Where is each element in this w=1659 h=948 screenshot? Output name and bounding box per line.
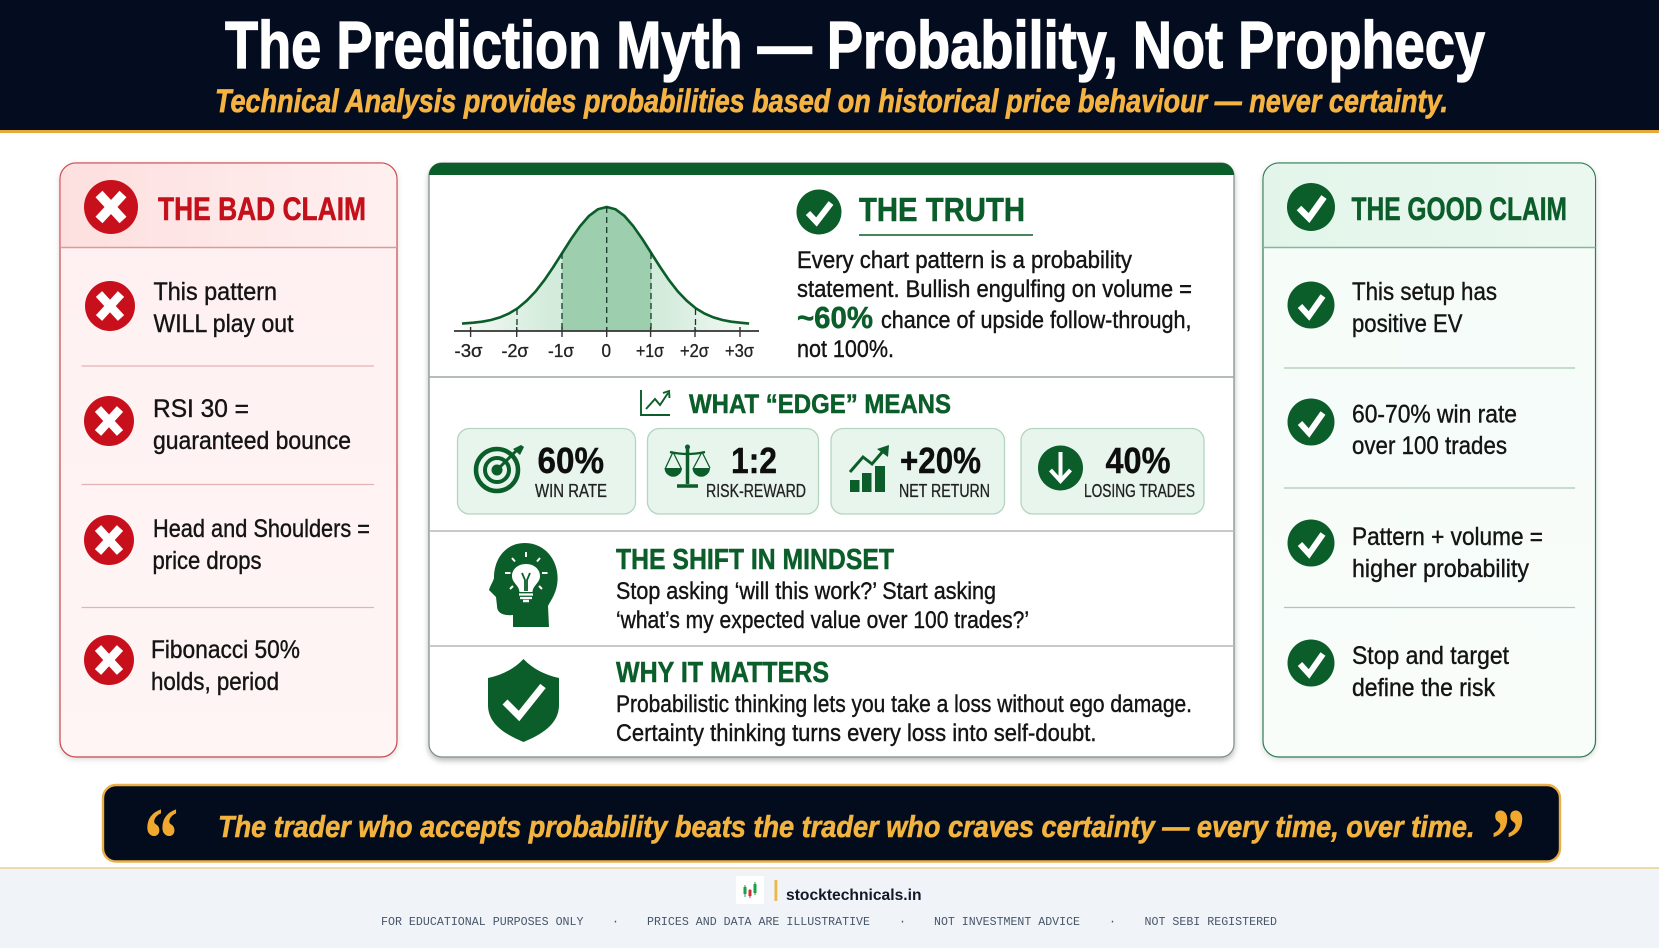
icon: truth check: [796, 190, 842, 234]
chart: bell curve: -2σ: [502, 341, 528, 361]
claim: stop and target: define the risk: [1352, 674, 1495, 702]
text block: the shift in mindset: ‘what’s my expected value over 100 trades?’: [616, 607, 1029, 634]
icon: candlestick logo: [736, 876, 764, 904]
subtitle: Technical Analysis provides probabilities based on historical price behaviour — never certainty.: [215, 83, 1448, 119]
icon: balance scales: [664, 444, 710, 486]
stat card: losing trades: LOSING TRADES: [1084, 481, 1195, 501]
heading: the good claim: THE GOOD CLAIM: [1352, 191, 1567, 227]
text block: the shift in mindset: Stop asking ‘will this work?’ Start asking: [616, 578, 996, 605]
heading: what edge means: WHAT “EDGE” MEANS: [689, 389, 951, 419]
claim: rsi 30 guaranteed bounce: guaranteed bounce: [153, 427, 351, 455]
stat card: net return: [831, 428, 1004, 514]
claim: fibonacci 50% holds: [84, 635, 300, 696]
claim: rsi 30 guaranteed bounce: [84, 395, 351, 455]
brand name: stocktechnicals.in: [786, 887, 922, 904]
text block: truth statement: statement. Bullish engulfing on volume =: [797, 276, 1192, 303]
stat card: losing trades: 40%: [1106, 440, 1170, 481]
text block: truth statement: not 100%.: [797, 336, 894, 363]
chart: bell curve: [454, 207, 759, 361]
icon: rising bars: [850, 445, 889, 492]
footer: [0, 868, 1659, 948]
text block: why it matters: Probabilistic thinking lets you take a loss without ego damage.: [616, 691, 1192, 718]
claim: win rate over 100 trades: [1288, 398, 1517, 460]
stat card: risk-reward: 1:2: [731, 440, 777, 481]
icon: target: [476, 445, 524, 491]
claim: win rate over 100 trades: over 100 trades: [1352, 432, 1507, 460]
chart: bell curve: +1σ: [636, 341, 664, 361]
claim: positive ev: This setup has: [1352, 278, 1497, 306]
claim: win rate over 100 trades: 60-70% win rate: [1352, 400, 1517, 428]
text block: why it matters: Certainty thinking turns every loss into self-doubt.: [616, 720, 1096, 747]
text block: why it matters: [616, 657, 1192, 747]
stat card: net return: NET RETURN: [899, 481, 990, 501]
icon: bad claim x: [84, 180, 138, 234]
stat card: win rate: 60%: [538, 440, 604, 481]
chart: bell curve: -3σ: [454, 341, 482, 361]
disclaimer: ·: [612, 916, 619, 929]
claim: this pattern will play out: WILL play out: [154, 310, 294, 338]
claim: head and shoulders price drops: [84, 515, 370, 575]
claim: pattern plus volume: [1288, 520, 1543, 583]
text block: the shift in mindset: THE SHIFT IN MINDSET: [616, 544, 894, 576]
chart: bell curve: 0: [602, 341, 611, 361]
icon: head with light bulb: [489, 543, 558, 627]
claim: this pattern will play out: This pattern: [154, 278, 277, 306]
icon: closing quote mark: ”: [1491, 792, 1525, 889]
stat card: losing trades: [1021, 428, 1204, 514]
heading: the bad claim: THE BAD CLAIM: [158, 191, 366, 227]
claim: fibonacci 50% holds: holds, period: [151, 668, 279, 696]
claim: stop and target: Stop and target: [1352, 642, 1509, 670]
claim: stop and target: [1288, 640, 1509, 702]
icon: opening quote mark: “: [144, 791, 178, 888]
stat card: net return: +20%: [900, 440, 981, 481]
disclaimer: NOT SEBI REGISTERED: [1144, 916, 1277, 929]
icon: shield check: [488, 659, 559, 742]
heading: the truth: THE TRUTH: [859, 191, 1025, 228]
claim: pattern plus volume: Pattern + volume =: [1352, 523, 1543, 551]
text block: truth statement: chance of upside follow-through,: [881, 307, 1192, 334]
chart: bell curve: +3σ: [725, 341, 754, 361]
disclaimer: NOT INVESTMENT ADVICE: [934, 916, 1080, 929]
claim: positive ev: positive EV: [1352, 310, 1463, 338]
panel: the bad claim: [60, 163, 397, 757]
claim: head and shoulders price drops: price drops: [152, 547, 262, 575]
quote text: The trader who accepts probability beats the trader who craves certainty — every time, over time.: [218, 810, 1474, 844]
claim: rsi 30 guaranteed bounce: RSI 30 =: [153, 395, 249, 423]
disclaimer: PRICES AND DATA ARE ILLUSTRATIVE: [647, 916, 870, 929]
claim: head and shoulders price drops: Head and Shoulders =: [153, 515, 370, 543]
text block: why it matters: WHY IT MATTERS: [616, 657, 829, 689]
stat card: win rate: [458, 428, 636, 514]
text block: truth statement: [797, 247, 1192, 363]
text block: truth statement: Every chart pattern is a probability: [797, 247, 1132, 274]
text block: the shift in mindset: [616, 544, 1029, 634]
disclaimer: [381, 916, 1277, 929]
claim: this pattern will play out: [85, 278, 294, 338]
chart: bell curve: -1σ: [548, 341, 574, 361]
stat card: risk-reward: RISK-REWARD: [706, 481, 806, 501]
icon: good claim check: [1287, 183, 1335, 231]
stat card: risk-reward: [648, 428, 818, 514]
claim: fibonacci 50% holds: Fibonacci 50%: [151, 636, 300, 664]
panel: the good claim: [1263, 163, 1596, 757]
callout: quote bar: [103, 785, 1560, 889]
disclaimer: ·: [1109, 916, 1116, 929]
header banner: [0, 0, 1659, 133]
chart: bell curve: +2σ: [680, 341, 709, 361]
disclaimer: ·: [899, 916, 906, 929]
text block: truth statement: ~60%: [797, 300, 873, 335]
claim: pattern plus volume: higher probability: [1352, 555, 1529, 583]
claim: positive ev: [1288, 278, 1497, 338]
icon: down arrow: [1038, 446, 1083, 490]
icon: line chart: [641, 390, 670, 415]
panel: the truth centre column: [429, 163, 1234, 757]
stat card: win rate: WIN RATE: [535, 481, 607, 501]
disclaimer: FOR EDUCATIONAL PURPOSES ONLY: [381, 916, 584, 929]
